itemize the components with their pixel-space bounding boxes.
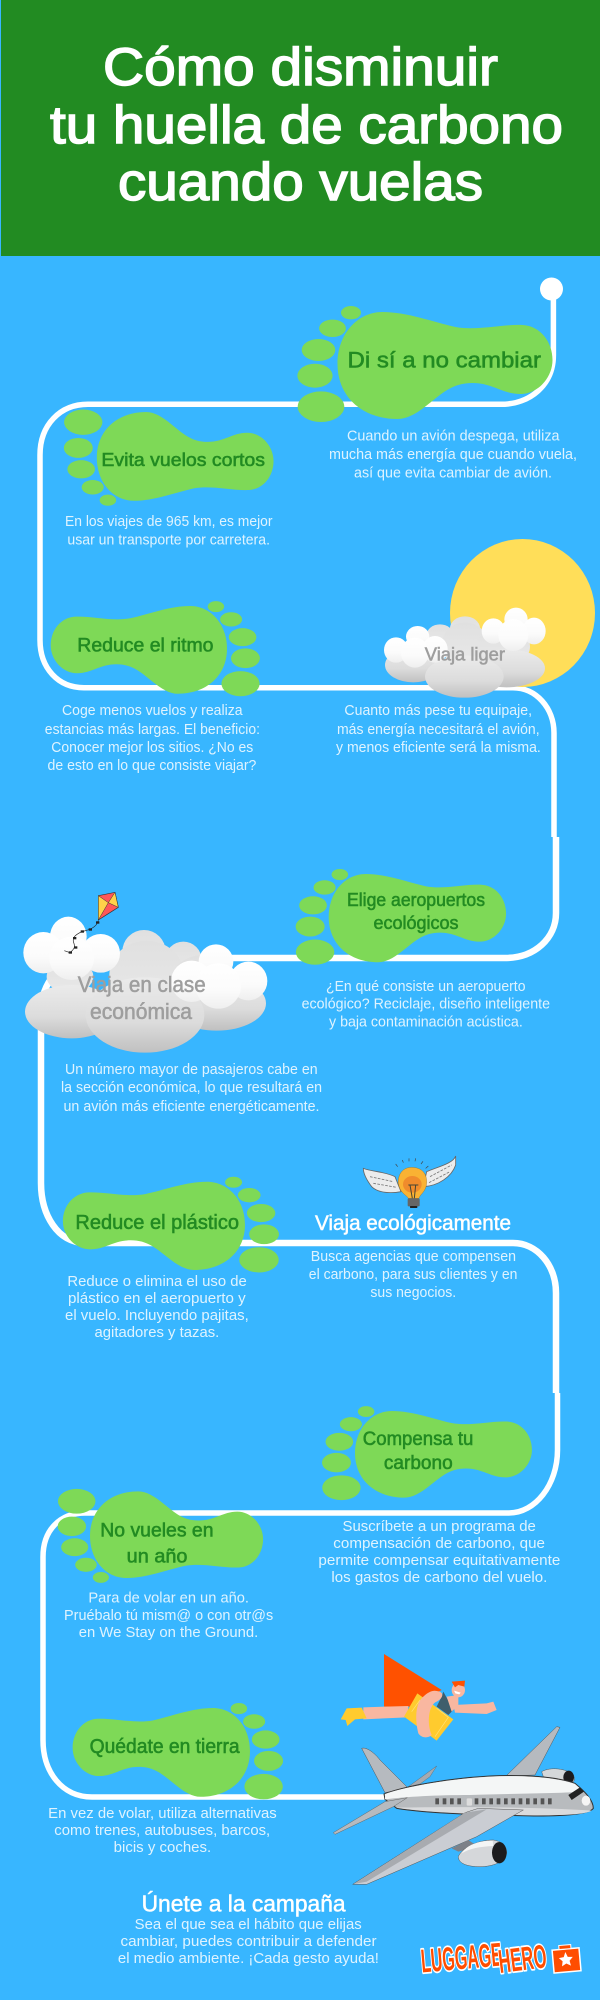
step: Evita vuelos cortos: usar un transporte por carretera. [67,532,270,548]
illustration: flying superhero with suitcase [341,1654,497,1741]
step: Reduce el ritmo: Conocer mejor los sitios. ¿No es [51,740,253,756]
icon: sun [450,539,595,687]
block: Viaja ecológicamente: el carbono, para sus clientes y en [309,1267,517,1283]
step: No vueles en un año: Para de volar en un año. [88,1591,249,1607]
step: Di sí a no cambiar: mucha más energía que cuando vuela, [329,447,577,463]
logo: Luggage Hero: LUGGAGE [419,1936,503,1979]
step: Viaja en clase económica with cloud [23,917,322,1115]
step: Reduce el ritmo: Coge menos vuelos y realiza [62,703,243,719]
closing block: Únete a la campaña: el medio ambiente. ¡Cada gesto ayuda! [118,1951,379,1967]
icon: winged light bulb [363,1156,456,1208]
icon: small cloud [384,608,546,698]
illustration: airplane [333,1727,593,1884]
title banner [1,0,600,256]
step: Viaja liger with cloud: y menos eficiente será la misma. [336,740,541,756]
step: No vueles en un año: en We Stay on the Ground. [79,1625,258,1641]
step: Compensa tu carbono: compensación de carbono, que [333,1536,545,1552]
step: Viaja en clase económica with cloud: Un número mayor de pasajeros cabe en [65,1062,318,1078]
block: Viaja ecológicamente: Viaja ecológicamente [315,1212,511,1235]
closing block: Únete a la campaña [118,1891,379,1967]
step: Elige aeropuertos ecológicos: ecológico? Reciclaje, diseño inteligente [302,996,550,1012]
block: Viaja ecológicamente [309,1212,517,1301]
step: Reduce el ritmo [45,601,260,774]
step: Viaja en clase económica with cloud: un avión más eficiente energéticamente. [64,1099,320,1115]
block: Viaja ecológicamente: Busca agencias que compensen [311,1249,516,1265]
icon: kite [64,892,118,954]
closing block: Únete a la campaña: Únete a la campaña [142,1891,346,1917]
step: No vueles en un año [58,1489,273,1641]
step: Quédate en tierra [48,1703,283,1856]
step: Compensa tu carbono [318,1406,560,1586]
journey path line [40,278,563,1797]
step: Quédate en tierra: En vez de volar, utiliza alternativas [48,1806,277,1822]
step: Di sí a no cambiar: Di sí a no cambiar [348,348,541,373]
step: Viaja en clase económica with cloud: Viaja en clase [78,972,206,997]
step: Viaja liger with cloud: más energía necesitará el avión, [337,722,540,738]
step: Reduce el ritmo: Reduce el ritmo [77,636,214,657]
step: Reduce el plástico: Reduce el plástico [75,1212,239,1234]
step: Viaja liger with cloud [336,608,546,756]
step: Evita vuelos cortos: En los viajes de 965 km, es mejor [65,514,273,530]
step: Di sí a no cambiar: así que evita cambiar de avión. [354,466,552,482]
title banner: Cómo disminuir [103,38,498,97]
step: Elige aeropuertos ecológicos: ecológicos [374,913,458,933]
step: Elige aeropuertos ecológicos [296,869,550,1031]
step: Compensa tu carbono: Compensa tu [363,1429,473,1450]
step: Reduce el plástico: el vuelo. Incluyendo pajitas, [65,1308,249,1324]
step: Reduce el ritmo: de esto en lo que consiste viajar? [48,758,256,774]
step: Compensa tu carbono: Suscríbete a un programa de [342,1519,536,1535]
step: Reduce el plástico: agitadores y tazas. [94,1325,219,1341]
icon: suitcase with star [552,1944,581,1973]
step: No vueles en un año: un año [127,1547,188,1568]
icon: big cloud [23,917,267,1053]
step: No vueles en un año: No vueles en [100,1521,214,1542]
closing block: Únete a la campaña: Sea el que sea el hábito que elijas [135,1917,362,1933]
step: Evita vuelos cortos [64,410,274,548]
step: Di sí a no cambiar: Cuando un avión despega, utiliza [347,429,560,445]
logo: Luggage Hero: HERO [496,1937,548,1980]
step: Evita vuelos cortos: Evita vuelos cortos [101,450,265,470]
title banner: tu huella de carbono [50,96,563,155]
closing block: Únete a la campaña: cambiar, puedes contribuir a defender [120,1934,377,1950]
title banner: cuando vuelas [118,153,483,212]
step: Viaja en clase económica with cloud: económica [90,999,193,1024]
step: Viaja liger with cloud: Viaja liger [425,645,505,665]
step: Elige aeropuertos ecológicos: ¿En qué consiste un aeropuerto [326,979,526,995]
step: Di sí a no cambiar [297,306,577,482]
step: Elige aeropuertos ecológicos: y baja contaminación acústica. [329,1015,523,1031]
step: Viaja en clase económica with cloud: la sección económica, lo que resultará en [61,1080,322,1096]
step: Viaja liger with cloud: Cuanto más pese tu equipaje, [344,703,532,719]
step: Quédate en tierra: como trenes, autobuses, barcos, [54,1823,270,1839]
step: Compensa tu carbono: carbono [384,1453,453,1474]
step: Compensa tu carbono: los gastos de carbono del vuelo. [331,1570,547,1586]
step: Reduce el plástico [63,1177,279,1341]
block: Viaja ecológicamente: sus negocios. [370,1285,456,1301]
step: Reduce el plástico: plástico en el aeropuerto y [68,1291,246,1307]
step: No vueles en un año: Pruébalo tú mism@ o con otr@s [64,1608,273,1624]
step: Elige aeropuertos ecológicos: Elige aeropuertos [347,890,485,910]
step: Quédate en tierra: Quédate en tierra [90,1736,240,1758]
step: Compensa tu carbono: permite compensar equitativamente [318,1553,560,1569]
step: Quédate en tierra: bicis y coches. [114,1840,211,1856]
step: Reduce el ritmo: estancias más largas. El beneficio: [45,722,260,738]
step: Reduce el plástico: Reduce o elimina el uso de [67,1274,247,1290]
